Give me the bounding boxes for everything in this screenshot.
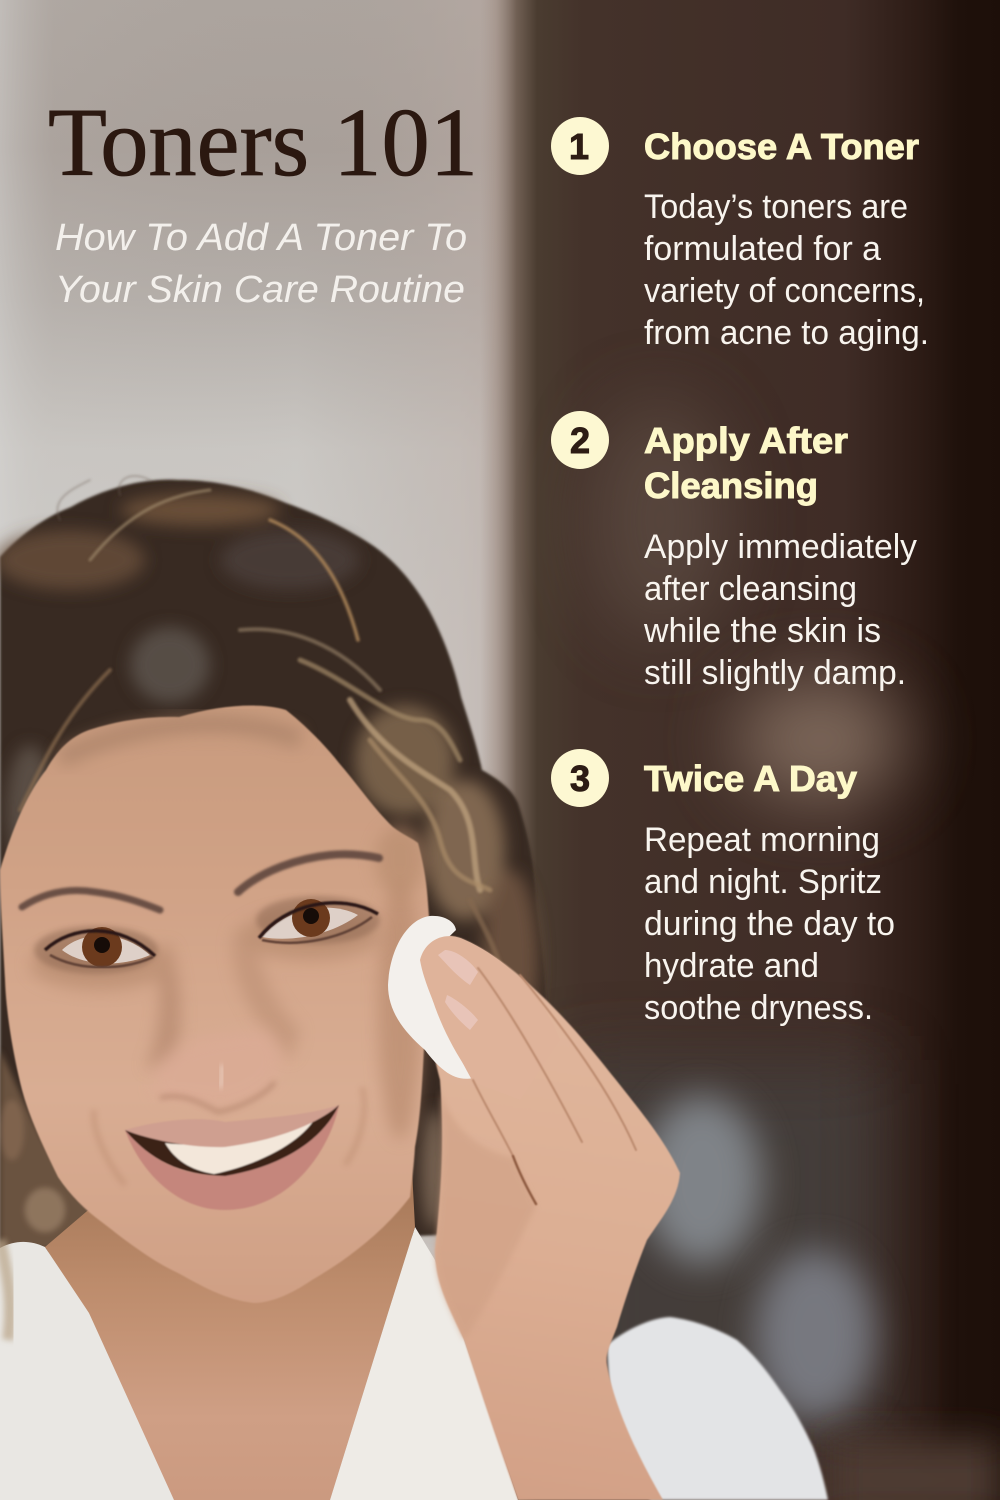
- subtitle: [55, 217, 467, 311]
- fingers: [420, 936, 636, 1204]
- step 2 text: still slightly damp.: [644, 654, 906, 692]
- step 2 text: Apply immediately: [644, 528, 917, 566]
- step 3: [551, 749, 895, 1027]
- step 3 text: hydrate and: [644, 947, 819, 985]
- step 3 number badge: [551, 749, 609, 807]
- step 2 text: after cleansing: [644, 570, 857, 608]
- nose: [154, 1029, 282, 1112]
- step 1 text: variety of concerns,: [644, 272, 925, 310]
- hair highlights: [20, 476, 506, 1020]
- step 2 heading: Apply After: [644, 420, 848, 461]
- subtitle: Your Skin Care Routine: [55, 269, 465, 311]
- hand with cotton pad: [388, 916, 680, 1500]
- smile: [125, 1105, 339, 1210]
- step 3 text: Repeat morning: [644, 821, 880, 859]
- hair tonal patches: [0, 494, 538, 1230]
- step 2 number badge: 2: [570, 420, 590, 461]
- nose and eye sockets shading: [30, 910, 380, 1070]
- subtitle: How To Add A Toner To: [55, 217, 467, 259]
- step 3 text: during the day to: [644, 905, 895, 943]
- lower left curls: [0, 1050, 130, 1300]
- step 2 number badge: [551, 411, 609, 469]
- step 1 text: formulated for a: [644, 230, 881, 268]
- step 3 heading: Twice A Day: [644, 758, 857, 799]
- hair: [0, 476, 546, 1340]
- cotton pad: [388, 916, 473, 1079]
- step 1: [551, 117, 929, 352]
- step 3 text: and night. Spritz: [644, 863, 882, 901]
- step 2: [551, 411, 917, 692]
- bathrobe: [0, 1227, 828, 1500]
- step 2 text: while the skin is: [643, 612, 881, 650]
- step 3 number badge: 3: [570, 758, 590, 799]
- step 1 number badge: 1: [569, 126, 589, 167]
- step 3 text: soothe dryness.: [644, 989, 873, 1027]
- title: Toners 101: [48, 89, 478, 197]
- right eye: [256, 896, 380, 944]
- step 1 text: from acne to aging.: [644, 314, 929, 352]
- left eye: [34, 926, 158, 974]
- step 2 heading: [644, 420, 848, 506]
- photo: woman applying toner: [0, 476, 828, 1500]
- step 2 text: [643, 528, 917, 692]
- step 2 heading: Cleansing: [644, 465, 818, 506]
- face: [0, 706, 430, 1303]
- step 1 text: [644, 188, 929, 352]
- smile lines: [94, 1087, 364, 1185]
- eyebrows: [22, 854, 379, 910]
- step 1 text: Today’s toners are: [644, 188, 908, 226]
- step 1 number badge: [551, 117, 609, 175]
- step 3 text: [644, 821, 895, 1027]
- neck and chest: [45, 1170, 415, 1500]
- step 1 heading: Choose A Toner: [644, 126, 919, 167]
